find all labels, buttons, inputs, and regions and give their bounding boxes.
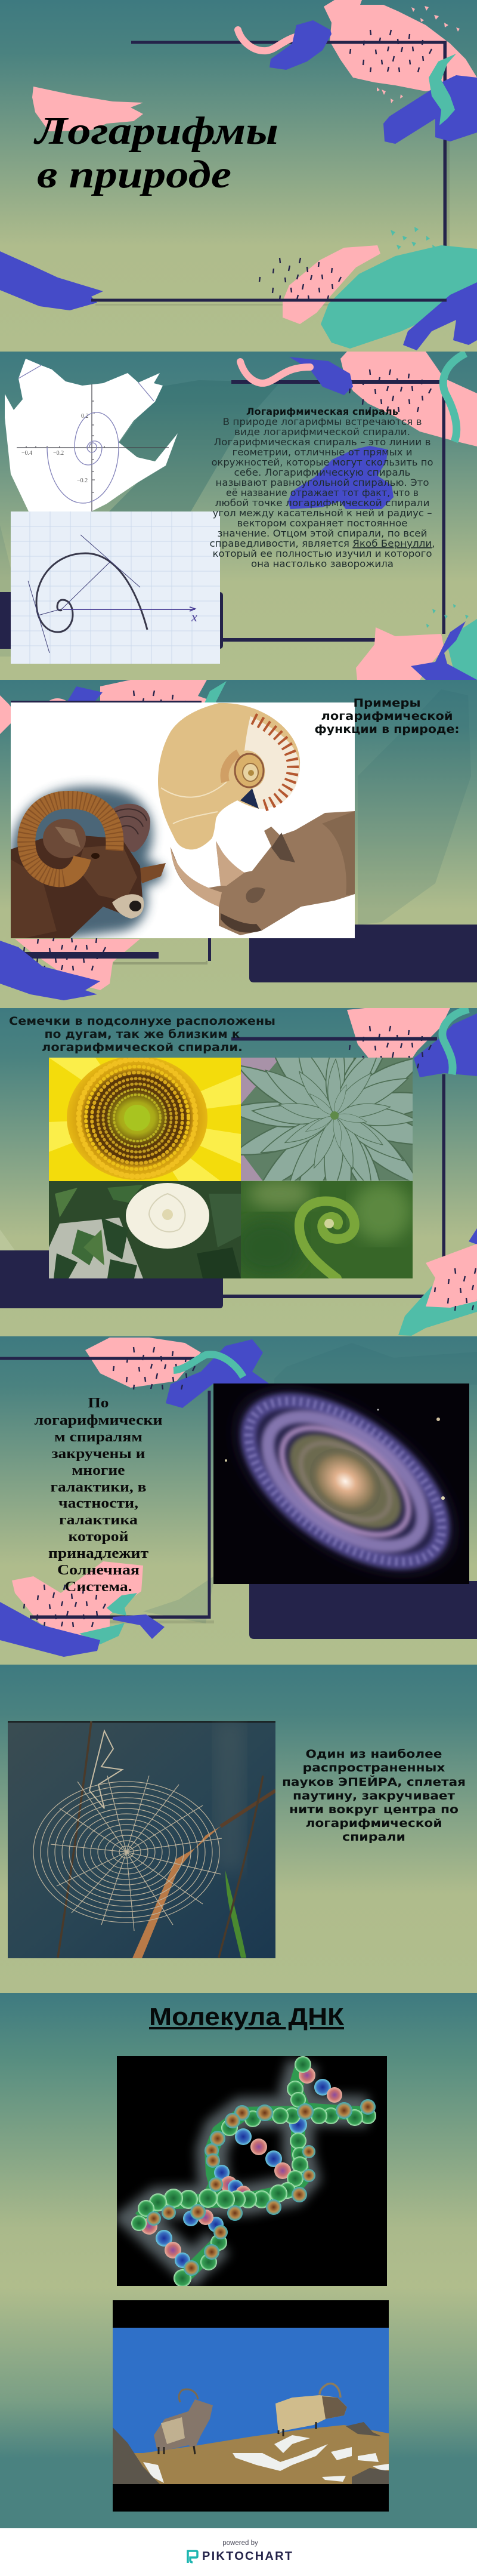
top decorations (0, 680, 227, 734)
left pink brush (32, 87, 143, 131)
footer: powered by: powered by (222, 2540, 258, 2547)
text: logarithmic spiral: Логарифмическая спираль – это линии в (213, 436, 430, 448)
frame (0, 1357, 211, 1619)
snow (143, 2435, 389, 2483)
title: Логарифмы (33, 109, 278, 153)
frame and navy panel (0, 1037, 445, 1308)
pink squiggle (240, 362, 310, 383)
text: galaxies: закручены и (51, 1446, 145, 1462)
text: sunflower: логарифмической спирали. (42, 1041, 243, 1054)
text: galaxies (35, 1395, 163, 1595)
DNA rungs (141, 2067, 342, 2268)
text: logarithmic spiral: геометрии, отличные от прямых и (233, 446, 413, 458)
text: galaxies: Солнечная (57, 1563, 140, 1578)
background tone shape (358, 689, 471, 925)
image: galaxy (213, 1383, 469, 1584)
text: spider: Один из наиболее (305, 1748, 442, 1761)
image: aloe (241, 1058, 413, 1181)
section 2: logarithmic spiral (0, 352, 477, 680)
right goat (275, 2384, 347, 2436)
image: camellia (49, 1181, 241, 1278)
top right blue brush (414, 1013, 477, 1077)
blue blob (288, 446, 394, 509)
hand drawn spiral image: x (191, 609, 197, 624)
rhino (171, 811, 355, 935)
spiral graph image: white cut-out (5, 359, 178, 511)
heading: examples: Примеры (353, 697, 421, 710)
text: sunflower: Семечки в подсолнухе расположены (9, 1015, 275, 1028)
spiral graph image: white cut-out: −0.4 (21, 450, 32, 457)
text: spider: паутину, закручивает (293, 1789, 455, 1802)
background tone shape (0, 1230, 15, 1250)
navy panel (0, 592, 223, 649)
teal stroke (442, 1009, 469, 1074)
big blue brush (383, 75, 477, 144)
DNA brown beads (147, 2099, 376, 2276)
tick marks (349, 369, 431, 412)
ram (11, 787, 166, 938)
teal stroke (429, 54, 456, 125)
heading: DNA molecule: Молекула ДНК (149, 2002, 344, 2030)
text: logarithmic spiral: справедливости, является Якоб Бернулли , (210, 538, 435, 549)
text: galaxies: которой (68, 1529, 129, 1545)
footer: powered by: PIKTOCHART (202, 2550, 292, 2563)
title: в природе (37, 153, 231, 196)
text: galaxies: многие (72, 1463, 125, 1478)
section 5: galaxy (0, 1336, 477, 1665)
bottom left decorations (0, 1561, 165, 1657)
footer: powered by (188, 2540, 292, 2563)
text: spider: нити вокруг центра по (289, 1803, 459, 1816)
text: logarithmic spiral: В природе логарифмы встречаются в (223, 416, 422, 427)
splatter pink (377, 6, 460, 103)
text: logarithmic spiral: угол между касательной к ней и радиус – (212, 507, 432, 519)
text: logarithmic spiral: вектором сохраняет постоянное (237, 517, 408, 529)
text: logarithmic spiral: называют равноугольной спиралью. Это (216, 477, 429, 488)
section 1: title (0, 0, 477, 352)
spiral graph image: white cut-out: −0.2 (77, 477, 88, 484)
text: spider: спирали (342, 1831, 405, 1844)
bottom right decorations (398, 1228, 477, 1336)
blue brush top (166, 1339, 269, 1408)
text: galaxies: галактики, в (50, 1480, 147, 1495)
text: logarithmic spiral: виде логарифмической спирали. (234, 426, 410, 437)
section 3: examples (0, 680, 477, 1008)
spiral graph image: white cut-out: −0.2 (53, 450, 64, 457)
text: spider: пауков ЭПЕЙРА, сплетая (282, 1775, 466, 1789)
text: spider (282, 1748, 466, 1844)
text: logarithmic spiral: значение. Отцом этой спирали, по всей (217, 528, 427, 539)
text: logarithmic spiral: любой точке логарифмической спирали (215, 497, 429, 509)
text: logarithmic spiral: она настолько заворожила (251, 558, 394, 569)
background tone shapes (109, 380, 280, 511)
text: logarithmic spiral: себе. Логарифмическую спираль (234, 467, 410, 478)
collage image: shell, ram, rhino (11, 702, 355, 938)
pink squiggle (238, 30, 309, 51)
text: sunflower: по дугам, так же близким к (44, 1028, 240, 1041)
tick marks bottom (259, 258, 341, 300)
DNA green beads (131, 2056, 376, 2287)
blue brush (270, 20, 332, 70)
bottom right teal (321, 245, 477, 349)
text: galaxies: Система. (64, 1579, 132, 1595)
hill (113, 2425, 389, 2484)
tick marks top (113, 1347, 195, 1389)
bottom right pink (283, 245, 380, 324)
title (33, 109, 278, 196)
left blue brush (0, 251, 103, 310)
pink top blob (85, 1338, 201, 1388)
frame (91, 41, 447, 302)
bottom decorations (0, 928, 211, 1000)
navy panel (249, 1581, 477, 1639)
text: galaxies: галактика (59, 1512, 138, 1528)
blue brush (289, 357, 353, 395)
pink blob top right (340, 352, 477, 446)
teal stroke (443, 353, 466, 442)
top right pink (347, 1008, 450, 1059)
bottom right splatter (391, 227, 436, 249)
navy panel (249, 925, 477, 982)
section 7: DNA and goats (0, 1993, 477, 2528)
text: logarithmic spiral: который ее полностью изучил и которого (212, 548, 432, 559)
text: sunflower (9, 1015, 275, 1054)
pink blob top right (324, 0, 477, 91)
image: spider web (8, 1721, 275, 1958)
frame (223, 380, 445, 642)
image: mountain goats (113, 2300, 389, 2512)
heading: examples: логарифмической (321, 710, 453, 723)
DNA strand backing (140, 2063, 368, 2278)
heading: examples (315, 697, 459, 736)
text: logarithmic spiral: её название отражает тот факт, что в (226, 487, 419, 498)
rocks (113, 2422, 389, 2484)
teal stroke top (174, 1354, 243, 1377)
spiral graph image: white cut-out: 0.2 (81, 413, 88, 420)
left goat (154, 2389, 213, 2454)
text: spider: логарифмической (305, 1817, 442, 1830)
frame bottom over shapes (91, 298, 447, 302)
bottom right blue (403, 282, 477, 350)
text: logarithmic spiral: Логарифмическая спираль (246, 406, 398, 417)
image: fern (241, 1181, 413, 1278)
hand drawn spiral image (11, 511, 220, 664)
tick marks (349, 1026, 431, 1068)
text: galaxies: м спиралям (54, 1429, 143, 1445)
text: galaxies: логарифмически (35, 1413, 163, 1428)
text: spider: распространенных (303, 1761, 445, 1774)
text: galaxies: частности, (58, 1496, 138, 1511)
image: DNA (117, 2056, 387, 2286)
icon: Piktochart logo (188, 2551, 197, 2563)
background tone shape (143, 1343, 477, 1623)
bottom right decorations (356, 604, 477, 680)
section 6: spider web (0, 1665, 477, 1993)
tick marks top (350, 30, 432, 72)
heading: examples: функции в природе: (315, 723, 459, 736)
text: galaxies: По (88, 1395, 109, 1411)
image: sunflower (49, 1058, 241, 1181)
text: logarithmic spiral: окружностей, которые могут скользить по (211, 457, 433, 468)
shell (158, 703, 300, 849)
section 4: plants (0, 1008, 477, 1336)
text: logarithmic spiral (210, 406, 435, 569)
text: galaxies: принадлежит (48, 1546, 148, 1561)
